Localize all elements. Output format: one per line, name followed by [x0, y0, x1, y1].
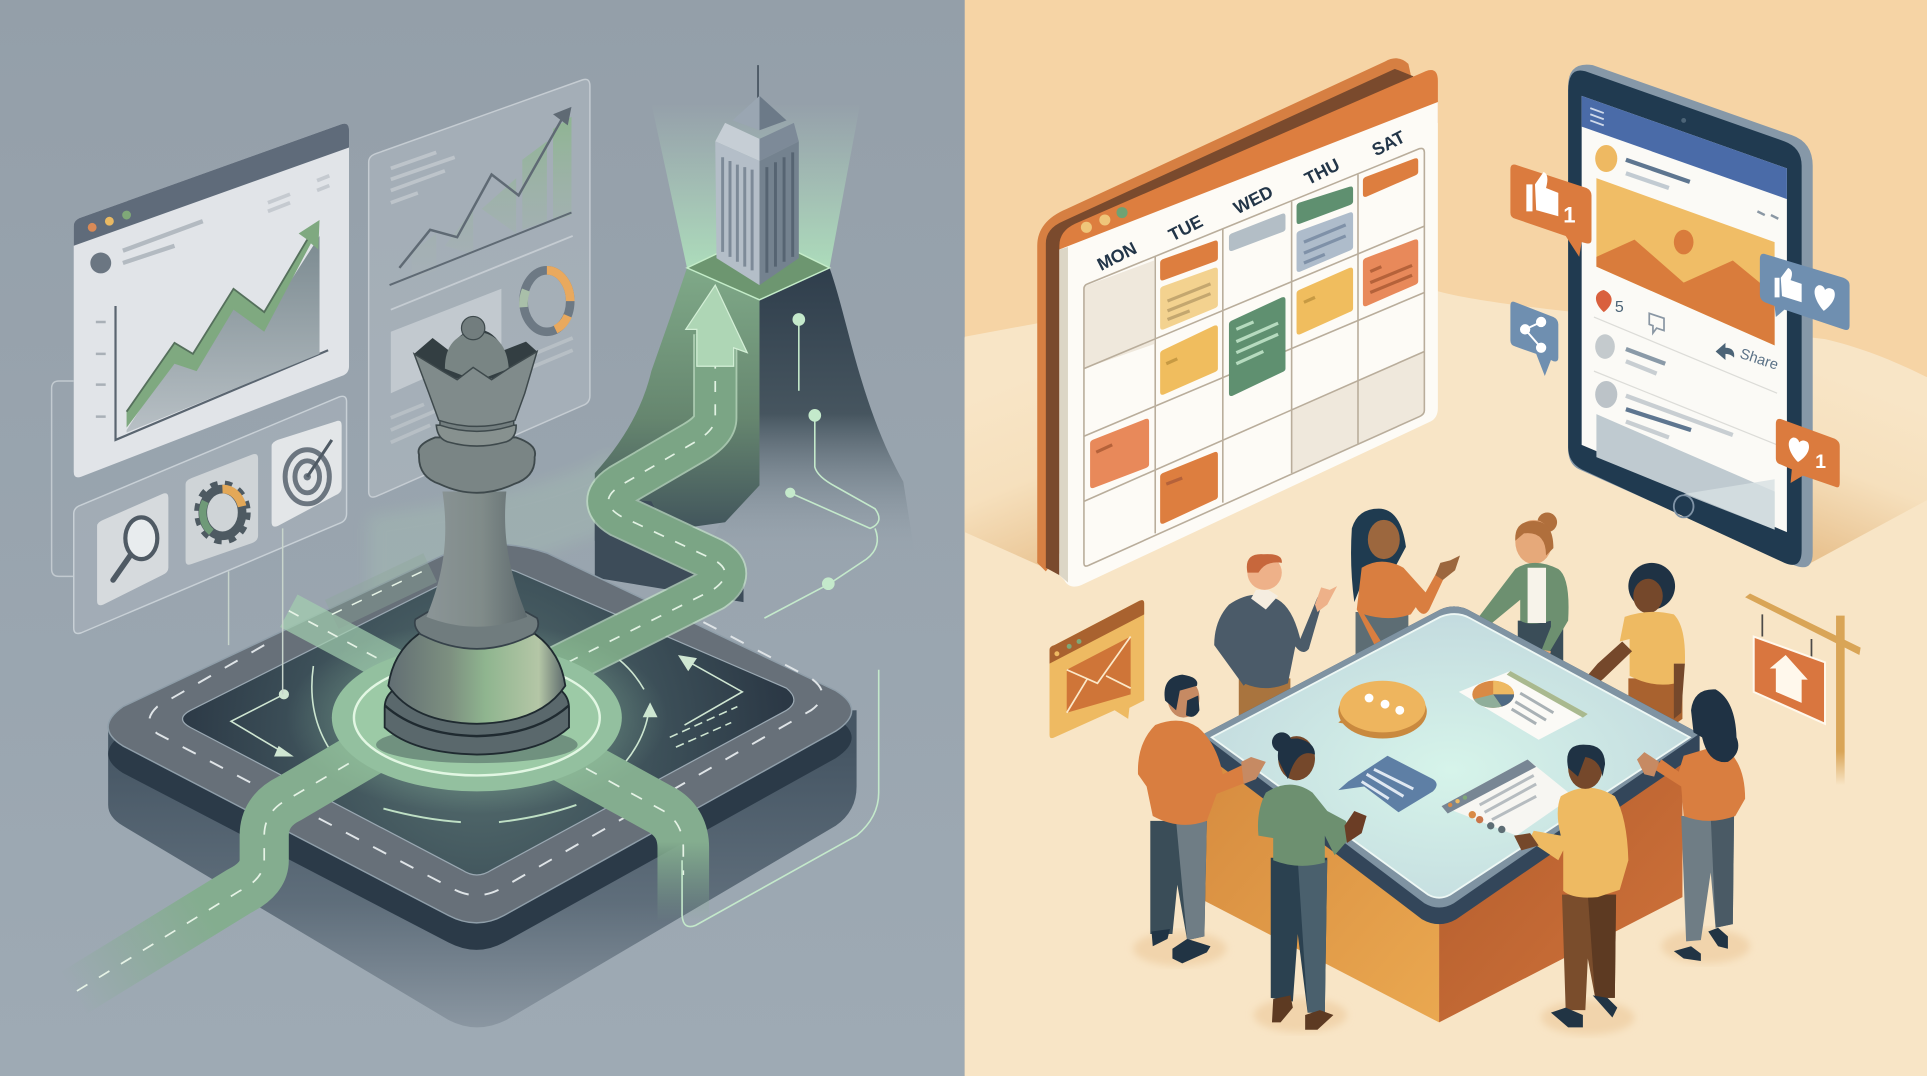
beige cells — [1084, 261, 1424, 473]
floor shadows — [965, 322, 1045, 568]
person: woman with long hair — [1637, 689, 1750, 963]
weekday labels: SAT — [1369, 127, 1408, 160]
table base — [1204, 750, 1439, 1022]
green roads — [74, 334, 725, 993]
small route arrows — [231, 656, 742, 822]
table glass — [1212, 614, 1690, 898]
plinth fade — [108, 710, 857, 1027]
window dots — [1081, 207, 1128, 233]
calendar events — [1090, 158, 1418, 524]
tablet floor shadow — [1807, 337, 1927, 565]
email card icon — [1050, 600, 1144, 738]
thumbs and heart badge — [1760, 254, 1850, 330]
orange chat bubble — [1338, 681, 1427, 739]
mountain with tower base — [369, 268, 916, 614]
connector lines — [229, 528, 283, 694]
icon: skyscraper — [715, 65, 799, 285]
post image — [1596, 178, 1775, 345]
blue chat bubble — [1338, 756, 1437, 812]
person: gray sweater man — [1214, 554, 1337, 719]
dashboard panel: rising chart — [74, 124, 349, 477]
weekday labels: MON — [1094, 238, 1140, 275]
share badge — [1510, 302, 1558, 376]
persons behind table — [1214, 509, 1685, 725]
person: woman in yellow shirt — [1577, 563, 1685, 725]
light beam — [651, 103, 860, 268]
heart badge — [1776, 419, 1840, 487]
dark edge band — [108, 571, 852, 950]
road surface — [108, 544, 852, 923]
donut chart — [523, 270, 570, 332]
weekday labels: WED — [1230, 181, 1276, 218]
glow ring — [286, 622, 667, 814]
weekday labels: THU — [1301, 154, 1343, 189]
table frame — [1202, 606, 1700, 924]
real estate sign icon — [1745, 594, 1861, 785]
weekday labels: TUE — [1165, 211, 1206, 245]
persons in front of table — [1133, 675, 1750, 1035]
tablet — [1568, 65, 1813, 567]
platform — [108, 544, 857, 1027]
icon: chess queen — [376, 316, 578, 763]
share action — [1716, 343, 1780, 374]
circuit line from road — [682, 670, 879, 927]
icon: target tile — [272, 421, 342, 527]
glass panel: icon tiles — [74, 396, 347, 633]
person: woman in green jacket — [1465, 512, 1569, 670]
glass panel: analytics — [369, 79, 590, 497]
heart badge: 1 — [1815, 451, 1826, 473]
browser list card — [1442, 759, 1573, 836]
lane dashes — [149, 621, 822, 895]
share action: Share — [1738, 346, 1780, 374]
like badge — [1510, 164, 1591, 257]
right background wall — [965, 0, 1927, 1076]
pie chart card — [1459, 671, 1588, 740]
tablet: 5 — [1615, 299, 1624, 316]
road arrow head — [686, 285, 747, 366]
person: man in orange sweater — [1133, 675, 1266, 966]
weekday labels — [1094, 127, 1408, 275]
left background panel — [0, 0, 965, 1076]
panel: community marketing scene — [965, 58, 1927, 1035]
panel: strategy scene — [52, 65, 916, 1027]
person: man in yellow sweater — [1514, 745, 1635, 1035]
like badge: 1 — [1563, 202, 1576, 227]
inner dark square — [182, 567, 794, 875]
green tower pedestal — [687, 233, 830, 300]
tablet screen — [1582, 96, 1787, 532]
back frame outline — [52, 381, 74, 576]
icon: gear tile — [186, 454, 258, 565]
calendar — [1037, 58, 1438, 587]
collaboration table — [1202, 606, 1700, 1022]
right floor — [965, 290, 1927, 1076]
calendar grid — [1084, 148, 1424, 566]
circuit lines — [764, 314, 879, 618]
person: woman in green sweater — [1254, 732, 1367, 1032]
icon: magnifier tile — [97, 493, 168, 605]
person: woman in orange top — [1351, 509, 1460, 664]
